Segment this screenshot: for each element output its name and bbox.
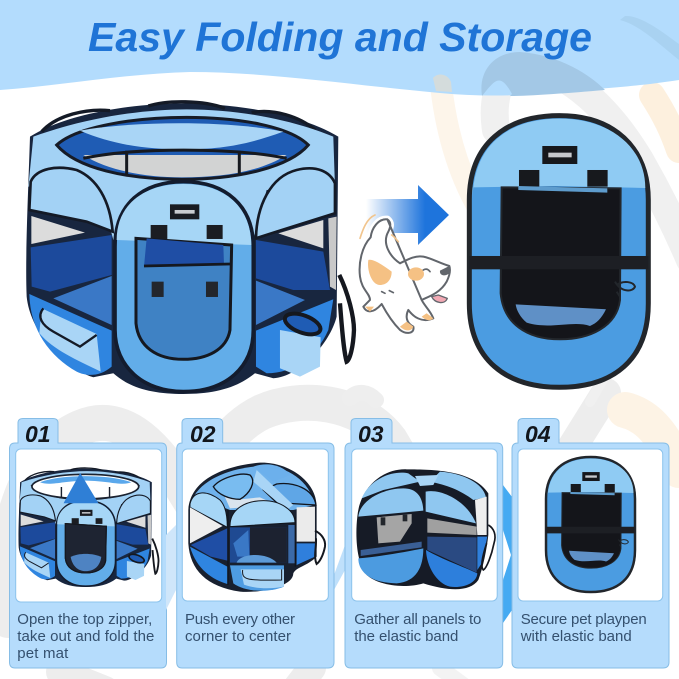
caption 02: Push every other [185,611,295,628]
step number 04: 04 [525,421,551,447]
illustration: pushing corners to center [188,463,325,592]
caption 04: Secure pet playpen [521,611,647,628]
caption 01: pet mat [17,645,69,662]
caption 04: with elastic band [520,628,632,645]
card background 02 [177,418,334,668]
chevrons between cards [166,485,512,623]
illustration: secured with elastic band [546,457,635,592]
image panel 03 [352,449,497,601]
caption 03: the elastic band [354,628,458,645]
image panel 01 [16,449,162,602]
card background 03 [345,418,503,668]
card background 04 [512,418,669,668]
step number 01: 01 [25,421,51,447]
title: Easy Folding and Storage [88,14,592,60]
caption 01: take out and fold the [17,628,154,645]
folded playpen [469,116,648,387]
step number 02: 02 [190,421,216,447]
caption 01: Open the top zipper, [17,611,152,628]
step card 03 [345,418,503,668]
caption 03: Gather all panels to [354,611,481,628]
top banner wave [0,0,679,96]
step card 02 [177,418,334,668]
image panel 04 [518,449,663,601]
step card 04 [512,418,669,668]
main unfolded playpen [26,102,354,394]
step number 03: 03 [358,421,384,447]
image panel 02 [182,449,328,601]
icon: happy dog [360,215,450,333]
card background 01 [10,418,166,668]
illustration: gathering panels [356,469,495,589]
illustration: opening top zipper [18,468,159,587]
caption 02: corner to center [185,628,291,645]
arrow [366,185,449,245]
step card 01 [10,418,166,668]
